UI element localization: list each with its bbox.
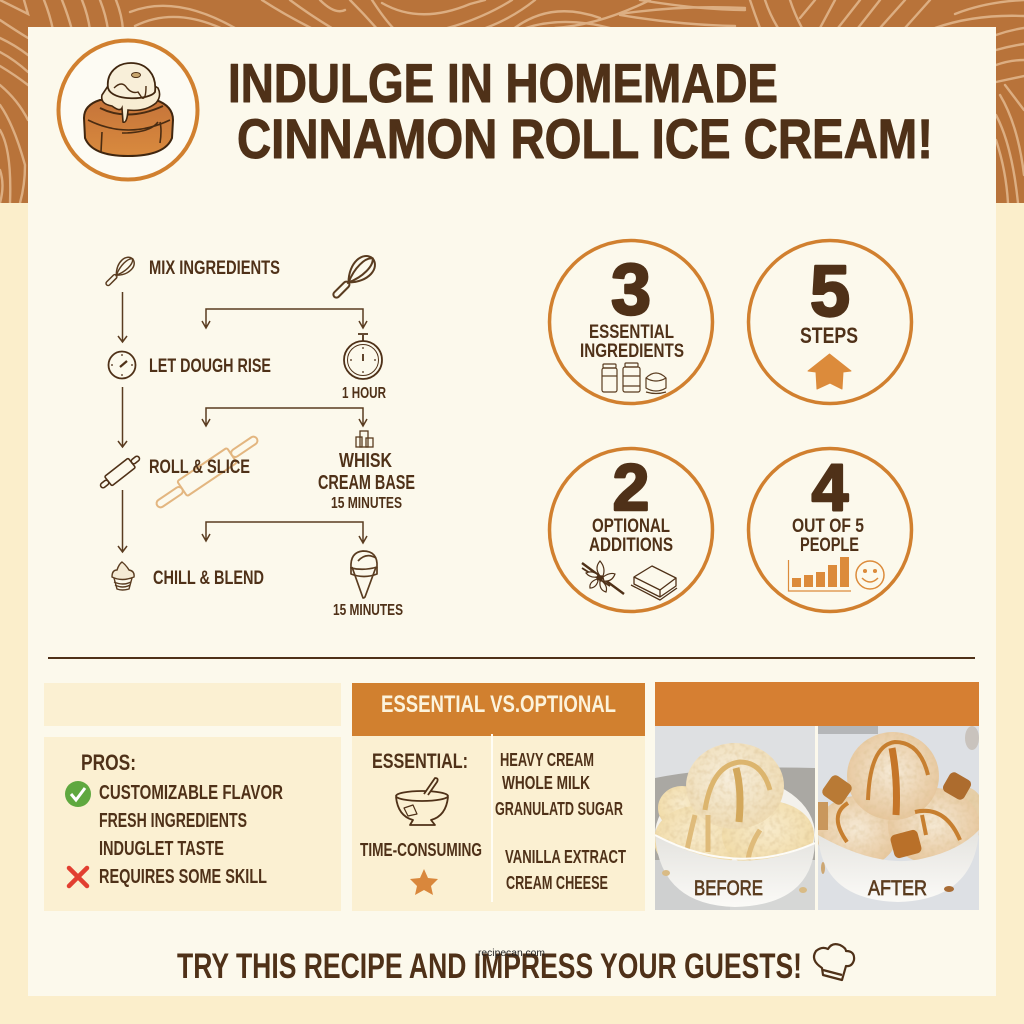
step label: roll and slice: ROLL & SLICE	[149, 456, 250, 478]
stat circle: 4 out of 5 people: 4	[812, 450, 849, 524]
stat circle: 3 essential ingredients: INGREDIENTS	[580, 341, 684, 362]
step: whisk cream base: 15 MINUTES	[331, 495, 402, 512]
section divider	[48, 657, 975, 659]
process flow	[97, 251, 415, 619]
stat circle: 5 steps	[748, 240, 912, 404]
pros list: FRESH INGREDIENTS	[99, 810, 247, 832]
stat circle: 3 essential ingredients: ESSENTIAL	[589, 322, 674, 343]
stat circle: 4 out of 5 people: PEOPLE	[800, 535, 859, 556]
stat circle: 2 optional additions	[550, 448, 712, 612]
panel: essential vs optional	[352, 683, 645, 911]
divider between photos	[815, 726, 818, 910]
step label: let dough rise: LET DOUGH RISE	[149, 355, 271, 377]
icon: cream cubes	[356, 431, 373, 447]
icon: ice cream cone	[351, 551, 377, 598]
optional ingredient list: VANILLA EXTRACT	[505, 847, 626, 867]
label: essential: ESSENTIAL:	[372, 750, 468, 773]
label: time consuming: TIME-CONSUMING	[360, 840, 482, 860]
title	[228, 52, 933, 170]
arrow: bracket two	[202, 408, 367, 426]
arrow: bracket one	[202, 309, 367, 328]
icon: small whisk	[102, 254, 137, 290]
icon: green check	[65, 781, 91, 807]
icon: small rolling pin	[97, 452, 143, 492]
icon: jars	[602, 363, 666, 394]
label: after: AFTER	[868, 877, 927, 900]
duration: 1 hour: 1 HOUR	[342, 385, 386, 402]
photo: after	[816, 726, 985, 910]
stat circle: 3 essential ingredients: 3	[611, 250, 651, 330]
divider	[491, 734, 493, 902]
icon: large whisk	[327, 251, 380, 304]
arrow: left column two	[118, 387, 127, 447]
step: whisk cream base: CREAM BASE	[318, 472, 415, 494]
essential ingredient list: HEAVY CREAM	[500, 750, 594, 770]
arrow: bracket three	[202, 522, 367, 543]
icon: cream cheese block	[631, 566, 677, 600]
blank header panel	[44, 683, 341, 726]
icon: cinnamon roll with ice cream badge	[58, 40, 198, 180]
stat circle: 5 steps: STEPS	[800, 323, 858, 348]
icon: chef hat	[814, 944, 854, 980]
stat circle: 5 steps: 5	[810, 252, 850, 332]
optional ingredient list	[505, 847, 626, 893]
icon: up arrow house	[808, 354, 851, 389]
duration: 15 minutes: 15 MINUTES	[333, 602, 403, 619]
arrow: left column three	[118, 490, 127, 552]
panel: pros and cons	[44, 737, 341, 911]
icon: cupcake	[112, 562, 134, 590]
step: whisk cream base	[318, 450, 415, 512]
step label: chill and blend: CHILL & BLEND	[153, 567, 264, 589]
pros list	[99, 782, 283, 860]
stat circle: 3 essential ingredients	[550, 240, 712, 404]
icon: vanilla flower	[582, 561, 624, 594]
icon: pale rolling pin	[152, 431, 262, 513]
essential ingredient list: GRANULATD SUGAR	[495, 799, 623, 819]
panel: before and after	[654, 682, 985, 910]
swirl patterned header band	[0, 0, 1024, 203]
step label: mix ingredients: MIX INGREDIENTS	[149, 257, 280, 279]
step: whisk cream base: WHISK	[339, 450, 392, 472]
stat circle: 2 optional additions: 2	[613, 450, 649, 524]
icon: star	[410, 869, 438, 895]
essential ingredient list: WHOLE MILK	[502, 773, 590, 793]
icon: red cross	[69, 868, 87, 886]
heading: essential vs optional: ESSENTIAL VS.OPTIONAL	[381, 691, 616, 718]
icon: mixing bowl	[396, 778, 448, 825]
watermark: recipecan.com	[478, 947, 545, 959]
icon: smiley	[856, 561, 884, 589]
photo: before	[654, 726, 815, 910]
optional ingredient list: CREAM CHEESE	[506, 873, 608, 893]
pros list: INDUGLET TASTE	[99, 838, 224, 860]
icon: gauge	[108, 352, 136, 378]
cons item: REQUIRES SOME SKILL	[99, 866, 267, 888]
call to action: TRY THIS RECIPE AND IMPRESS YOUR GUESTS!	[177, 947, 802, 986]
stat circle: 2 optional additions: OPTIONAL	[592, 516, 670, 537]
stat circle: 4 out of 5 people: OUT OF 5	[792, 516, 864, 537]
arrow: whisk to timer	[118, 292, 127, 342]
essential ingredient list	[495, 750, 623, 819]
icon: bar chart	[788, 557, 851, 591]
stat circle: 2 optional additions: ADDITIONS	[589, 535, 673, 556]
label: before: BEFORE	[694, 877, 763, 900]
pros list: CUSTOMIZABLE FLAVOR	[99, 782, 283, 804]
icon: stopwatch	[344, 334, 382, 379]
title: INDULGE IN HOMEMADE	[228, 52, 778, 114]
stat circle: 4 out of 5 people	[748, 448, 912, 612]
heading: pros: PROS:	[81, 750, 136, 775]
